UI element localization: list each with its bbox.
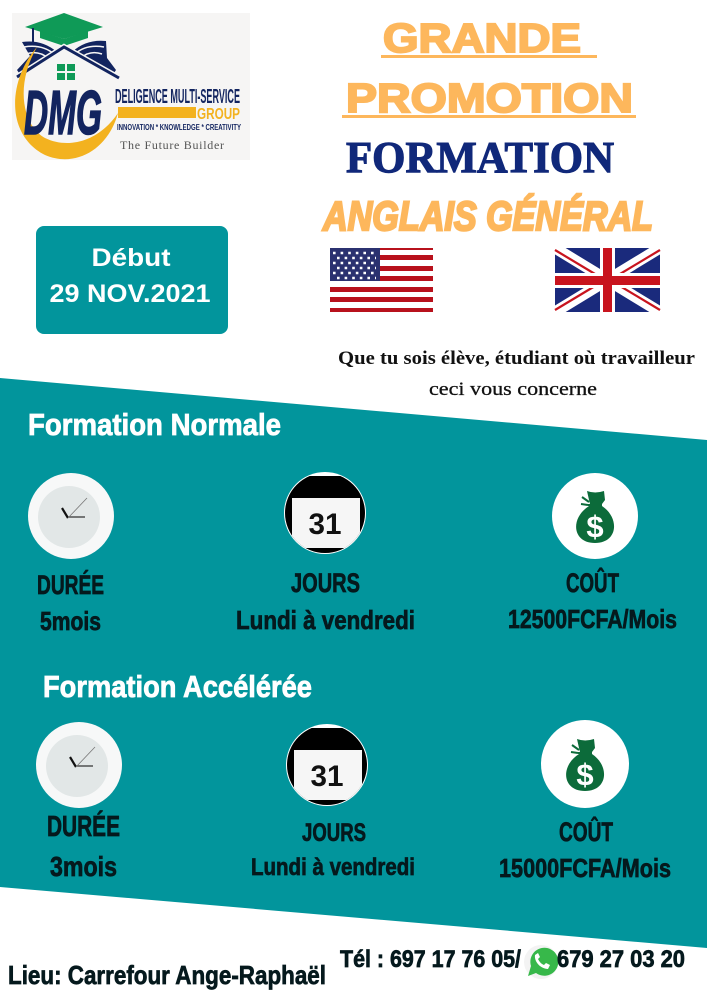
column: jours accélérée bbox=[251, 819, 415, 881]
column: durée accélérée bbox=[47, 809, 120, 882]
logo icon: books and roof bbox=[17, 41, 119, 78]
title: Promotion: PROMOTION bbox=[346, 75, 633, 121]
intro text: Que tu sois élève, étudiant où travailleur bbox=[338, 348, 696, 369]
location: Lieu: Carrefour Ange-Raphaël bbox=[8, 960, 326, 990]
phone: second number: 679 27 03 20 bbox=[557, 946, 685, 973]
column: coût accélérée: COÛT bbox=[559, 816, 613, 847]
icon: money bag 2 bbox=[541, 720, 629, 808]
logo: Deligence Multi-Service Group bbox=[12, 13, 250, 160]
logo group label: GROUP bbox=[197, 106, 240, 123]
column: coût accélérée bbox=[499, 816, 671, 883]
column: coût normale: COÛT bbox=[566, 567, 619, 598]
icon: whatsapp bbox=[524, 945, 558, 979]
column: jours normale: JOURS bbox=[291, 568, 360, 598]
title: Grande: GRANDE bbox=[383, 15, 581, 61]
column: durée normale: DURÉE bbox=[37, 569, 104, 600]
icon: money bag 1: $ bbox=[586, 509, 604, 544]
column: coût normale bbox=[508, 567, 677, 634]
logo tagline: INNOVATION * KNOWLEDGE * CREATIVITY bbox=[117, 123, 241, 132]
intro text: ceci vous concerne bbox=[429, 379, 597, 400]
column: durée accélérée: DURÉE bbox=[47, 809, 120, 843]
phone: first number: Tél : 697 17 76 05/ bbox=[340, 946, 521, 973]
flag: United States bbox=[330, 248, 433, 312]
icon: calendar 2 bbox=[286, 724, 368, 806]
logo yellow bar bbox=[118, 107, 196, 118]
column: jours normale: Lundi à vendredi bbox=[236, 605, 415, 635]
heading: Formation: FORMATION bbox=[346, 133, 614, 182]
icon: clock 1 bbox=[28, 473, 114, 559]
icon: money bag 2: $ bbox=[576, 757, 594, 792]
logo icon: window bbox=[57, 64, 75, 80]
icon: clock 2 bbox=[36, 722, 122, 808]
column: jours accélérée: Lundi à vendredi bbox=[251, 854, 415, 881]
heading: Formation Accélérée: Formation Accélérée bbox=[43, 669, 312, 704]
icon: money bag 1 bbox=[552, 473, 638, 559]
flag: United Kingdom bbox=[555, 248, 660, 312]
column: jours accélérée: JOURS bbox=[302, 819, 366, 847]
logo monogram: DMG bbox=[24, 79, 102, 148]
logo icon: graduation cap bbox=[25, 13, 103, 46]
badge text: date: 29 NOV.2021 bbox=[50, 280, 211, 308]
text: DELIGENCE MULTI-SERVICE bbox=[115, 86, 240, 108]
date badge bbox=[36, 226, 228, 334]
icon: calendar 1: 31 bbox=[308, 508, 342, 541]
column: durée accélérée: 3mois bbox=[50, 851, 117, 882]
icon: calendar 1 bbox=[284, 472, 366, 554]
background panel: teal band bbox=[0, 378, 707, 948]
icon: calendar 2: 31 bbox=[310, 760, 344, 793]
intro text bbox=[338, 348, 696, 400]
logo slogan: The Future Builder bbox=[120, 138, 224, 152]
logo icon: yellow crescent bbox=[15, 47, 118, 159]
badge text: Début: Début bbox=[92, 244, 171, 272]
column: jours normale bbox=[236, 568, 415, 635]
column: durée normale bbox=[37, 569, 104, 636]
heading: Formation Normale: Formation Normale bbox=[28, 407, 281, 442]
column: coût accélérée: 15000FCFA/Mois bbox=[499, 853, 671, 883]
column: durée normale: 5mois bbox=[40, 606, 101, 636]
